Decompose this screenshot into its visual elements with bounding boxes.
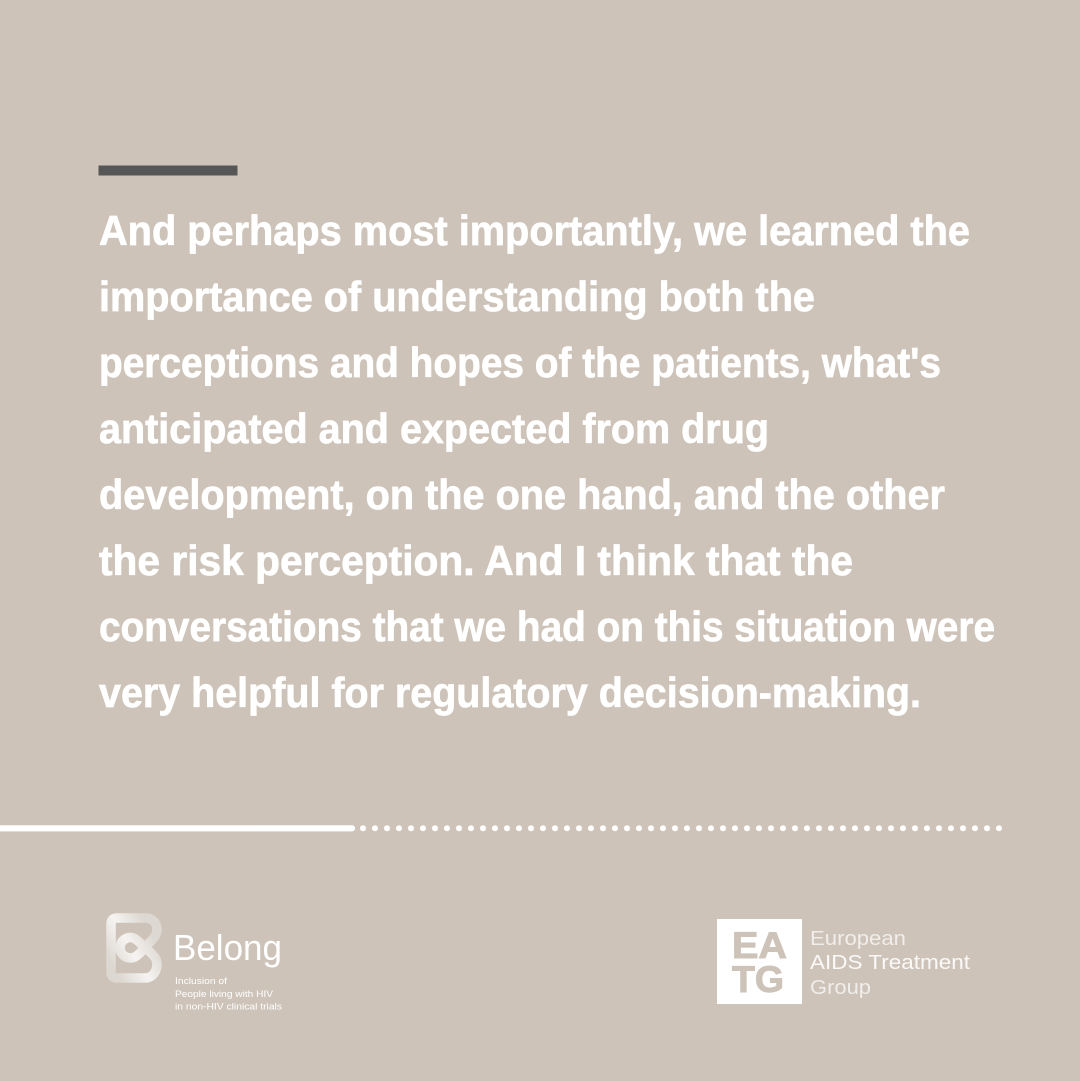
quote text: anticipated and expected from drug xyxy=(99,405,769,452)
quote text: And perhaps most importantly, we learned the xyxy=(99,207,970,254)
logo name xyxy=(810,927,970,999)
logo tagline: Inclusion of xyxy=(175,976,227,987)
logo name: European xyxy=(810,927,906,950)
logo letters xyxy=(732,925,787,1000)
divider line with dots xyxy=(0,822,1005,835)
accent bar xyxy=(98,166,238,176)
quote text: very helpful for regulatory decision-making. xyxy=(99,669,921,716)
quote text: development, on the one hand, and the other xyxy=(99,471,945,518)
logo square xyxy=(717,919,802,1004)
quote text: importance of understanding both the xyxy=(99,273,815,320)
logo letters: TG xyxy=(732,959,784,1000)
logo name: AIDS Treatment xyxy=(810,951,970,974)
logo tagline xyxy=(175,976,282,1012)
icon: Belong mark xyxy=(111,918,157,978)
logo: Belong xyxy=(111,918,282,1012)
logo tagline: People living with HIV xyxy=(175,989,274,1000)
logo letters: EA xyxy=(732,925,787,966)
quote text xyxy=(99,207,995,716)
logo: EATG xyxy=(717,919,970,1004)
logo wordmark: Belong xyxy=(173,927,282,968)
logo tagline: in non-HIV clinical trials xyxy=(175,1002,282,1012)
logo name: Group xyxy=(810,976,871,999)
quote text: conversations that we had on this situation were xyxy=(99,603,995,650)
quote text: perceptions and hopes of the patients, what's xyxy=(99,339,941,386)
quote text: the risk perception. And I think that the xyxy=(99,537,853,584)
